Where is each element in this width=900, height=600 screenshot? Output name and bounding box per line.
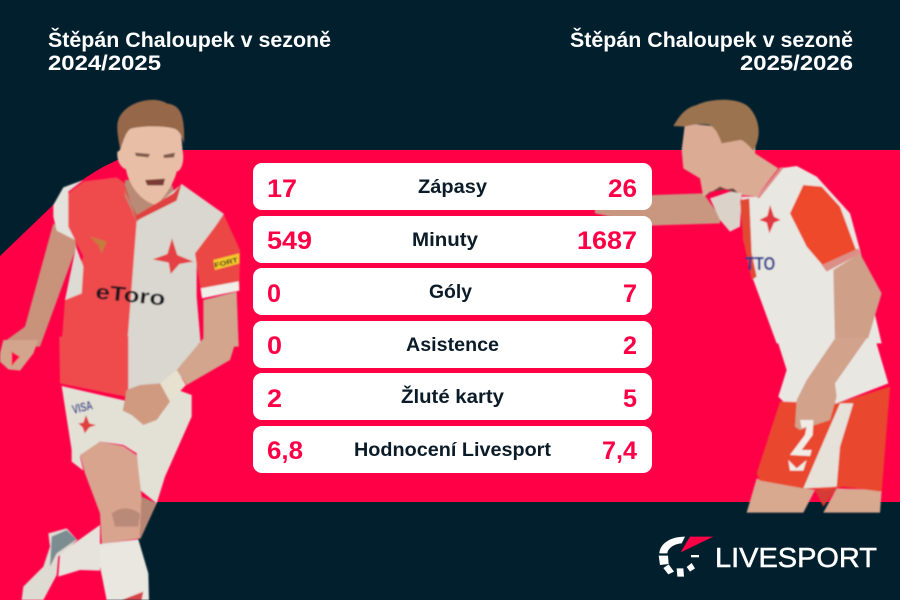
- stat row: Žluté karty: Žluté karty: [401, 386, 504, 408]
- stat row: Žluté karty: 2: [267, 385, 282, 413]
- stat row: Góly: [253, 268, 652, 315]
- heading: season 2025/2026: 2025/2026: [740, 52, 853, 75]
- stat row: Minuty: [253, 216, 652, 263]
- heading: season 2024/2025: 2024/2025: [48, 52, 161, 75]
- stat row: Góly: 0: [267, 280, 281, 308]
- stat row: Minuty: Minuty: [412, 230, 478, 251]
- stat row: Asistence: [253, 321, 652, 368]
- heading: season 2025/2026: Štěpán Chaloupek v sezoně: [570, 28, 853, 52]
- stat row: Zápasy: [253, 163, 652, 210]
- Livesport logo: [659, 537, 877, 577]
- stat row: Hodnocení Livesport: 6,8: [267, 437, 303, 465]
- heading: season 2025/2026: [570, 28, 853, 75]
- right player photo illustration: TTO: [745, 253, 775, 274]
- left player photo illustration: VISA: [71, 398, 94, 417]
- stat row: Zápasy: Zápasy: [418, 177, 487, 198]
- stat row: Hodnocení Livesport: [253, 426, 652, 473]
- heading: season 2024/2025: Štěpán Chaloupek v sezoně: [48, 28, 331, 52]
- stat row: Hodnocení Livesport: 7,4: [602, 437, 637, 465]
- stat row: Žluté karty: [253, 373, 652, 420]
- red background panel: [0, 150, 900, 600]
- left player photo illustration: FORT: [214, 257, 239, 270]
- stat row: Zápasy: 17: [267, 175, 297, 203]
- left player photo illustration: eToro: [94, 280, 166, 311]
- stat row: Žluté karty: 5: [623, 385, 637, 413]
- stat row: Góly: 7: [623, 280, 637, 308]
- stat row: Zápasy: 26: [608, 175, 637, 203]
- stat row: Góly: Góly: [429, 282, 472, 303]
- wordmark: LIVESPORT: [715, 542, 877, 573]
- stat row: Minuty: 1687: [577, 227, 637, 255]
- stat row: Asistence: 0: [267, 332, 282, 360]
- heading: season 2024/2025: [48, 28, 331, 75]
- stat row: Asistence: Asistence: [406, 335, 499, 356]
- stat row: Hodnocení Livesport: Hodnocení Livesport: [354, 440, 552, 461]
- right player photo illustration: [595, 100, 890, 513]
- stat row: Asistence: 2: [623, 332, 637, 360]
- icon: Livesport speedometer mark: [659, 537, 713, 577]
- stat row: Minuty: 549: [267, 227, 312, 255]
- left player photo illustration: [0, 100, 240, 600]
